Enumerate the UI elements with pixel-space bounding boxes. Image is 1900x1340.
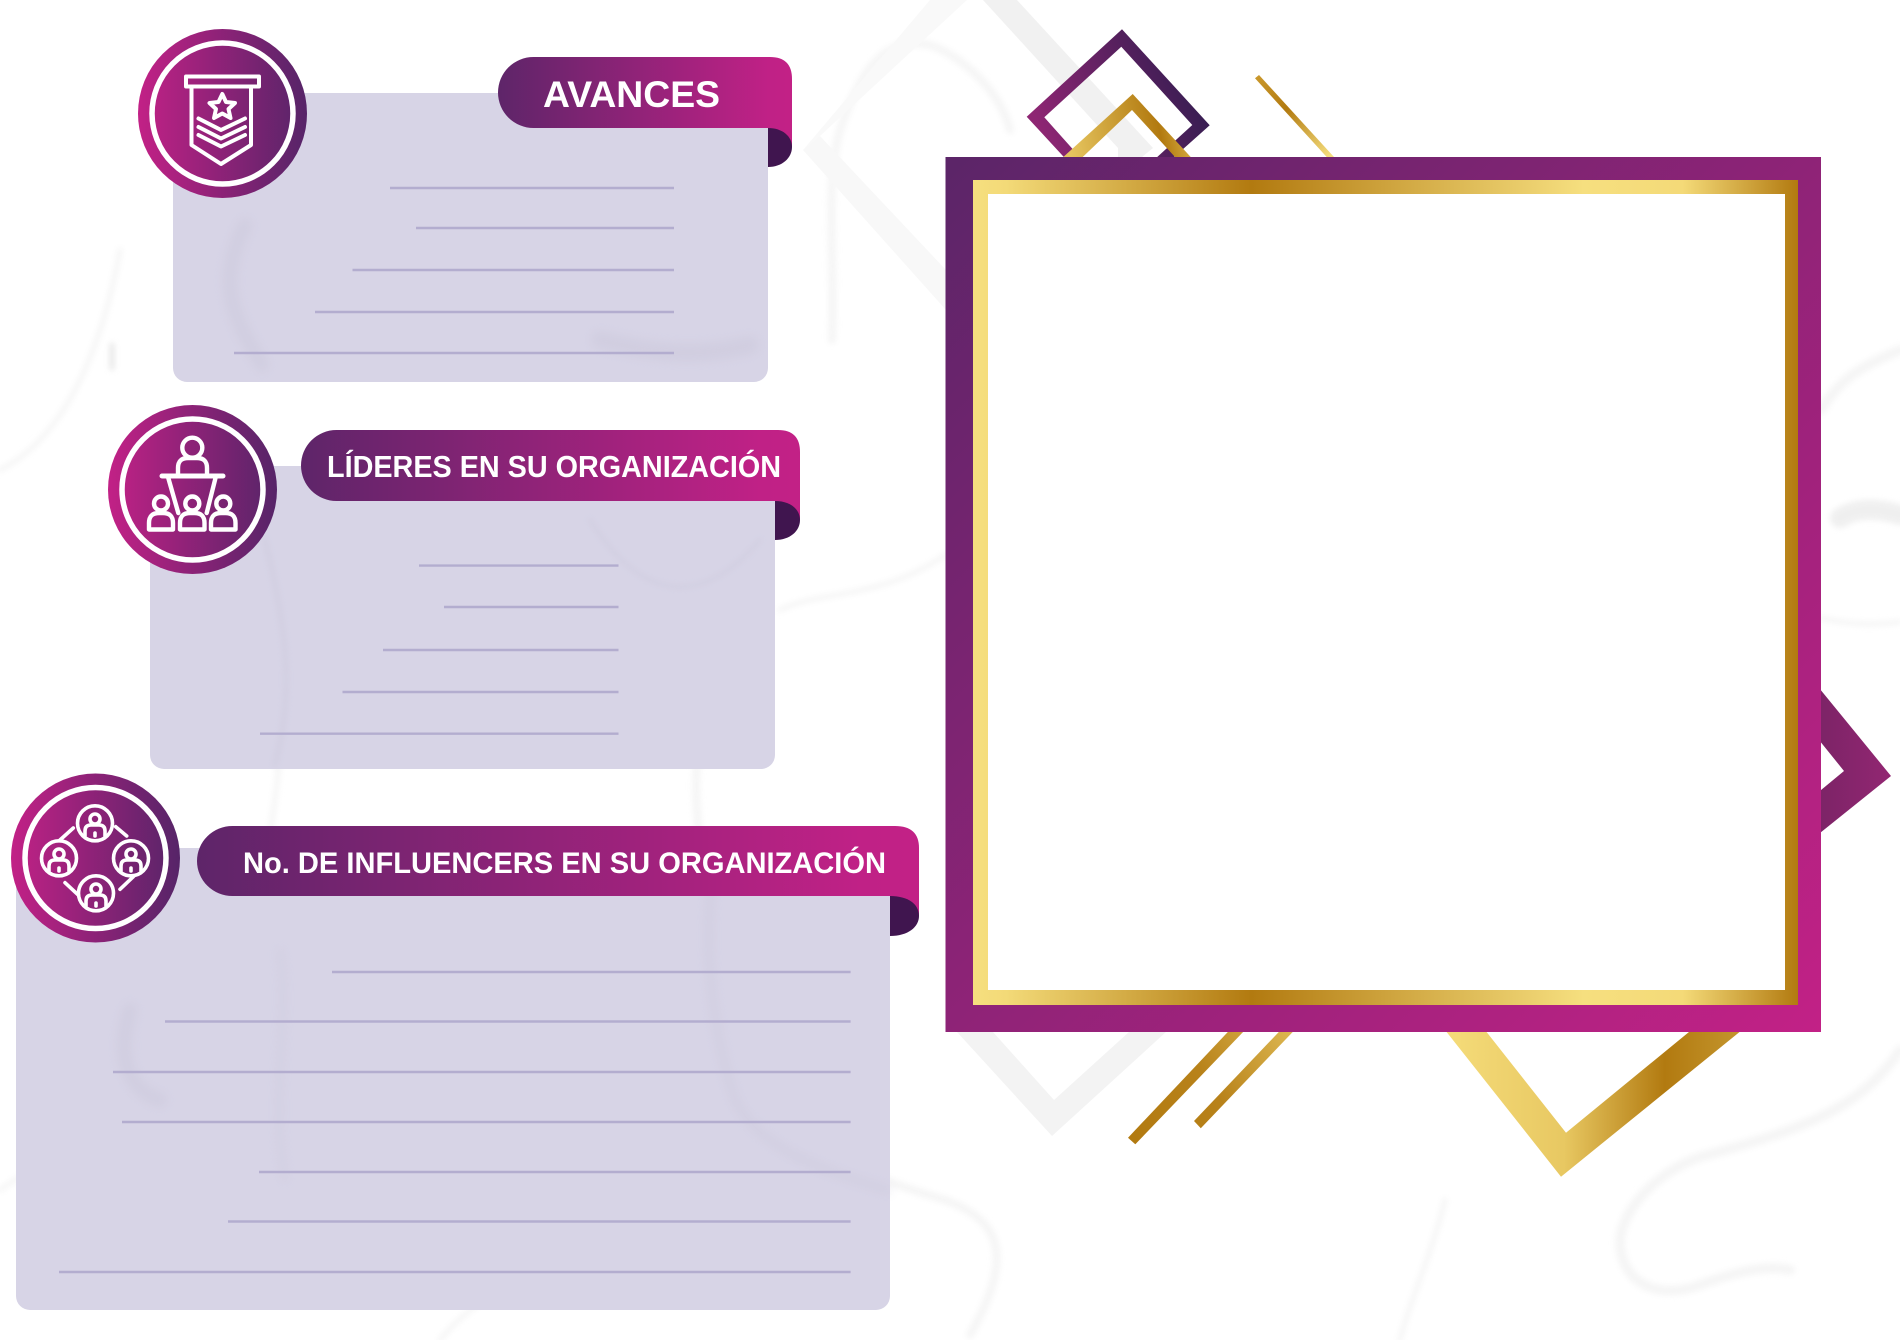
ribbon: AVANCES [543, 73, 720, 115]
decoration: gold V bottom [1445, 1030, 1742, 1177]
decoration: gold diagonal sticks bottom [1128, 1030, 1295, 1144]
icon: influencer network [11, 774, 180, 942]
ribbon [197, 826, 919, 936]
panel: avances [138, 29, 792, 382]
card background [173, 93, 768, 382]
decoration: gold chevron [1063, 94, 1191, 157]
icon: speaker and audience [108, 405, 277, 574]
ribbon [301, 430, 800, 540]
decoration: purple triangle right [1815, 683, 1891, 837]
panel: no. de influencers en su organizacion [11, 774, 919, 1310]
decoration: gold diagonal stick top [1255, 75, 1334, 157]
text lines [59, 972, 851, 1272]
frame: main image frame [946, 157, 1821, 1032]
marble texture in card [124, 860, 888, 1190]
icon: shield badge [138, 29, 307, 198]
text lines [260, 566, 618, 734]
marble texture in card [230, 225, 750, 365]
card background [16, 848, 890, 1310]
panel: lideres en su organizacion [108, 405, 800, 769]
marble texture in card [265, 520, 760, 765]
decoration: purple diamond outline [1027, 29, 1210, 211]
ribbon: LÍDERES EN SU ORGANIZACIÓN [327, 448, 781, 484]
background: grey diamond outline [803, 0, 1166, 1136]
ribbon [498, 57, 792, 167]
ribbon: No. DE INFLUENCERS EN SU ORGANIZACIÓN [243, 846, 886, 880]
card background [150, 466, 775, 769]
text lines [234, 188, 674, 353]
